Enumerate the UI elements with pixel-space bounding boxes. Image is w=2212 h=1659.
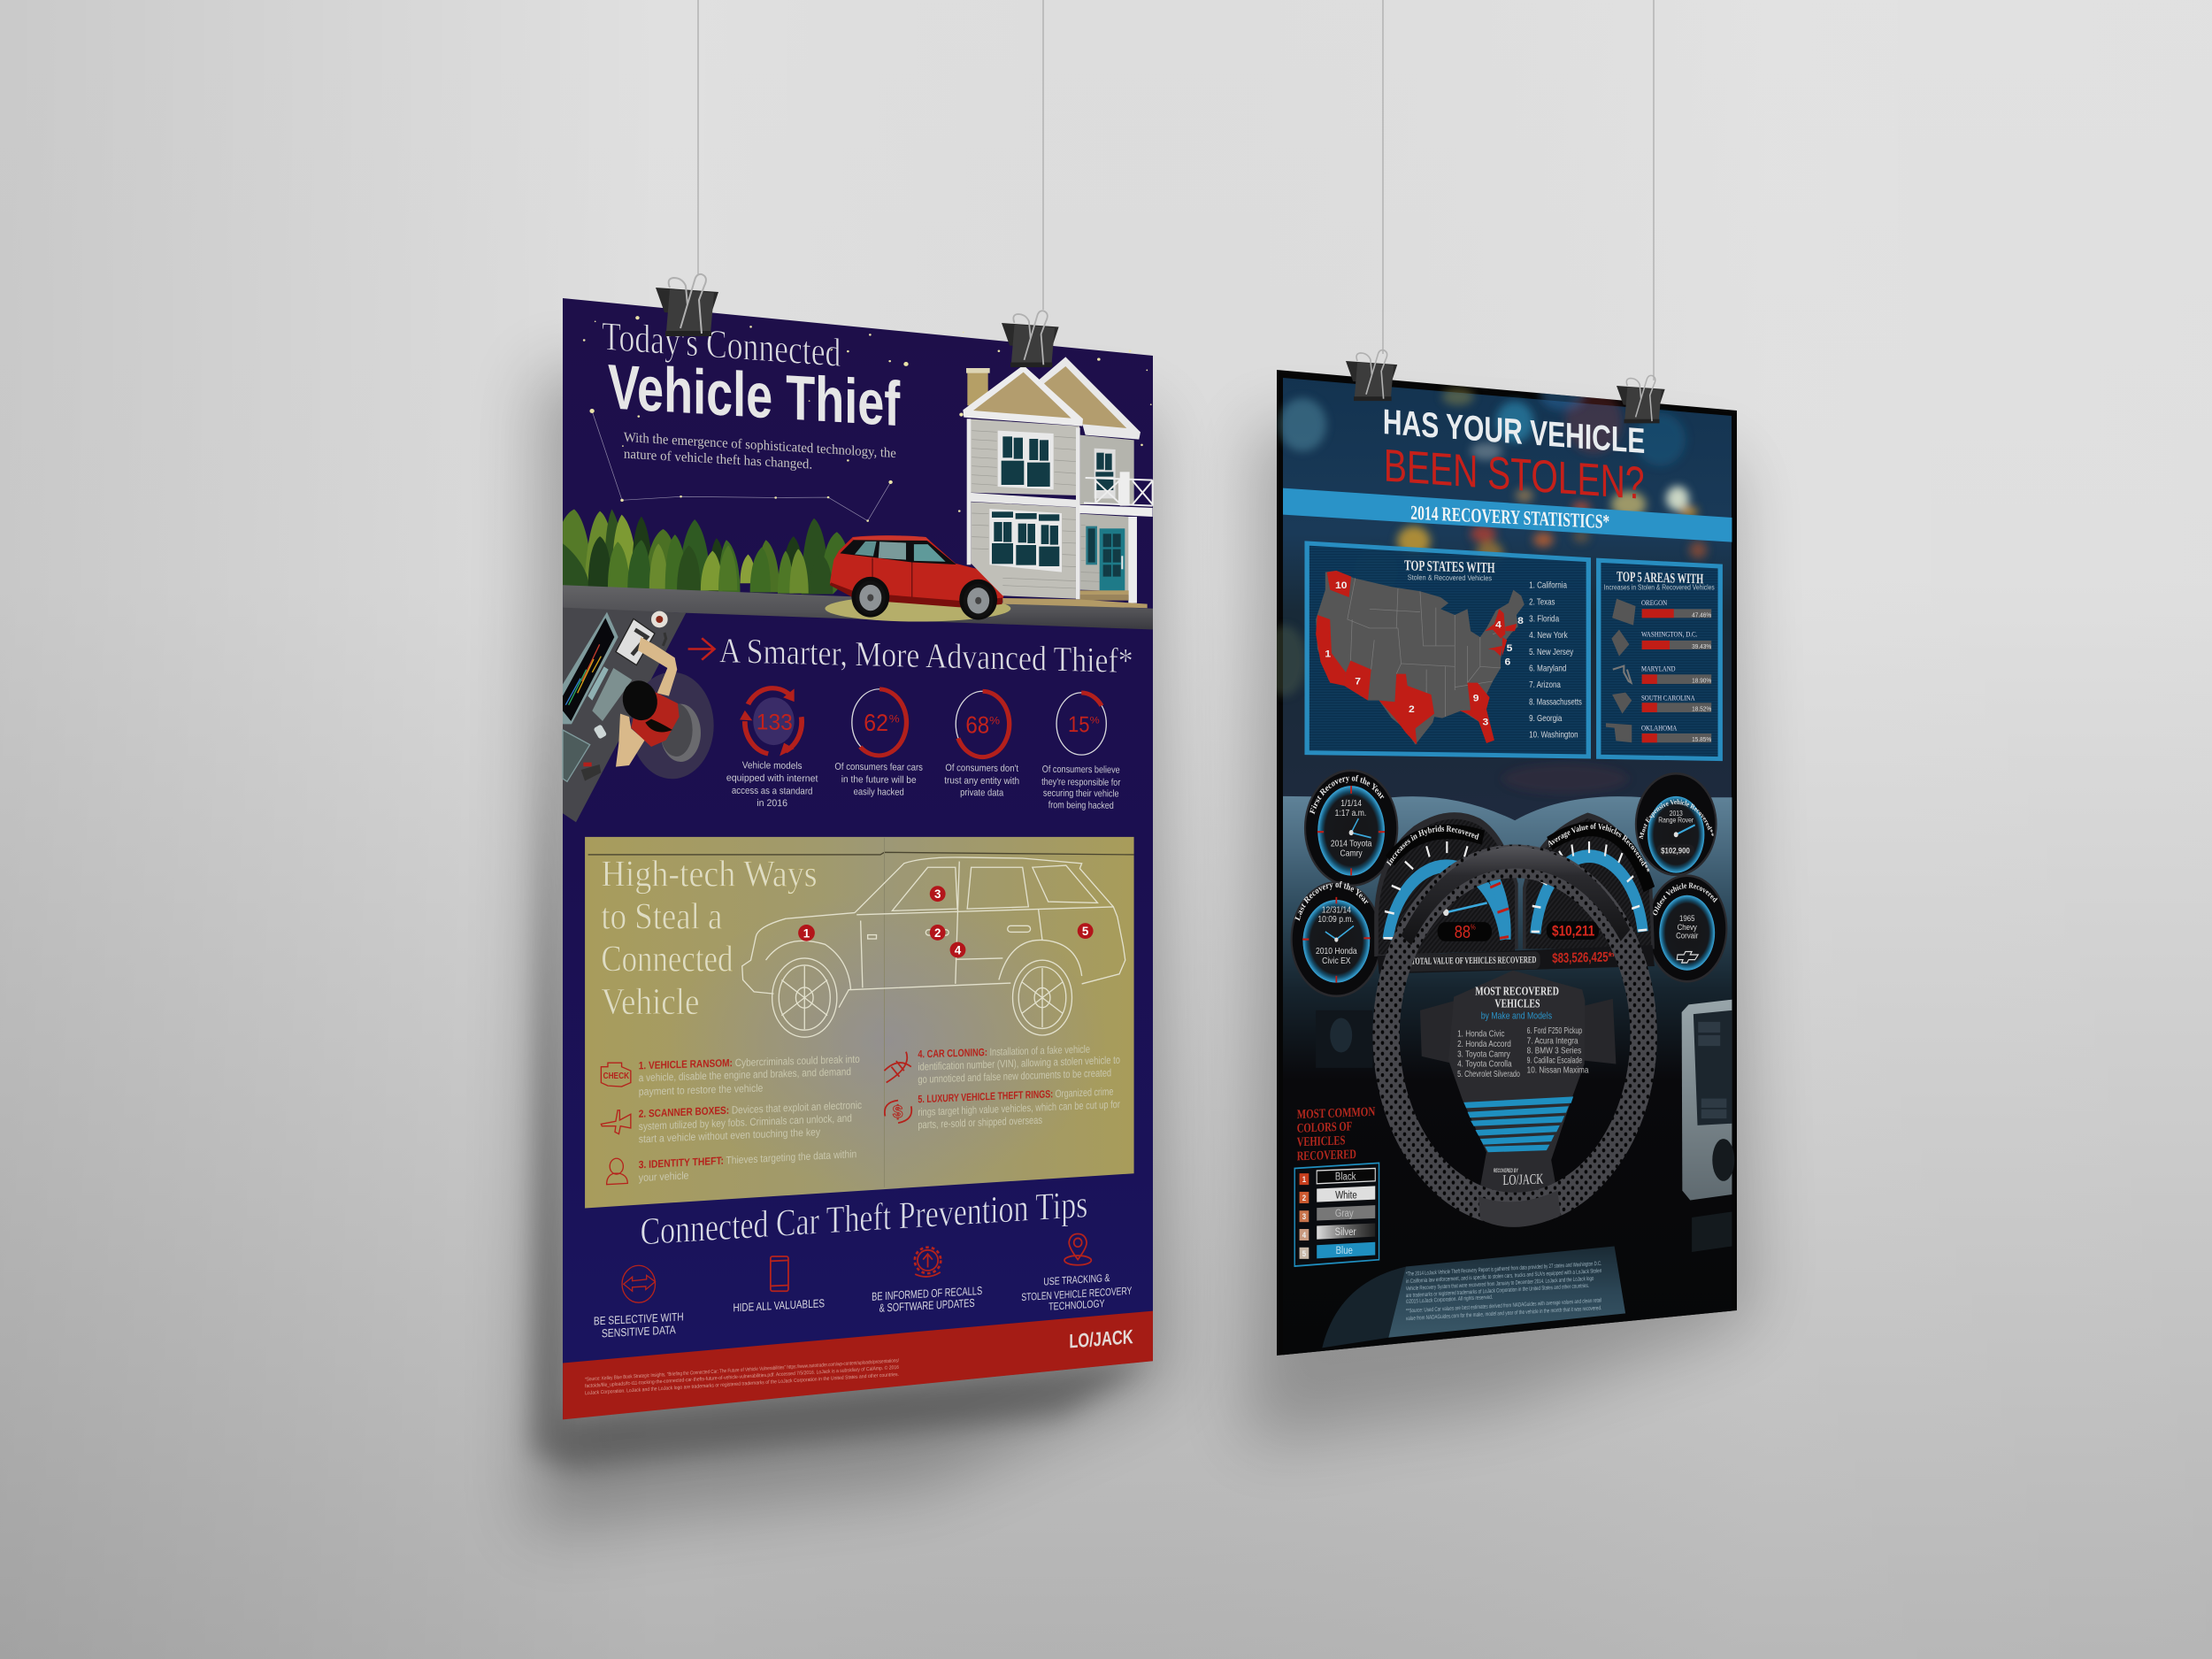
footer source text	[585, 1358, 899, 1396]
colors heading: COLORS OF	[1297, 1118, 1352, 1135]
tip: sensitive data	[594, 1265, 684, 1340]
disclaimer text: value from NADAGuides.com for the make, model and year of the vehicle in the month that it was recovered.	[1406, 1306, 1602, 1322]
recovered vehicles list: 1. Honda Civic	[1457, 1029, 1505, 1039]
panel heading: Connected	[601, 939, 733, 980]
prevention heading: Connected Car Theft Prevention Tips	[641, 1183, 1087, 1254]
recovered vehicles heading: MOST RECOVERED	[1475, 984, 1559, 998]
disclaimer text: *The 2014 LoJack Vehicle Theft Recovery Report is gathered from data provided by 27 states and Washington D.C.	[1406, 1261, 1602, 1278]
colors legend: Silver	[1335, 1226, 1356, 1238]
method 1: payment to restore the vehicle	[639, 1082, 764, 1098]
gauge: first recovery: First Recovery of the Year	[1310, 775, 1384, 814]
tip: tracking: STOLEN VEHICLE RECOVERY	[1021, 1285, 1132, 1303]
method 2: start a vehicle without even touching the key	[639, 1125, 820, 1145]
states ranking: 2. Texas	[1529, 598, 1555, 607]
gauge: hybrids: 88	[1455, 921, 1471, 941]
footer source text: *Source: Kelley Blue Book Strategic Insights, "Briefing the Connected Car: The Future of Vehicle Vulnerabilities" https://www.autotrader.com/wp-content/uploads/presentations/	[585, 1358, 899, 1383]
stat 15%: %	[1090, 714, 1100, 726]
states ranking: 9. Georgia	[1529, 714, 1562, 724]
stat 15%: 15	[1068, 711, 1090, 737]
panel heading: to Steal a	[601, 895, 723, 937]
disclaimer text: are trademarks or registered trademarks of LoJack Corporation in the United States and other countries.	[1406, 1283, 1589, 1299]
method 1	[601, 1053, 860, 1098]
stat 15%: Of consumers believe	[1042, 764, 1120, 775]
wheel logo	[1494, 1168, 1543, 1188]
gauge: first recovery: 1:17 a.m.	[1335, 808, 1366, 818]
states ranking: 1. California	[1529, 581, 1567, 591]
gauge: last recovery: Last Recovery of the Year	[1294, 881, 1368, 922]
areas heading: TOP 5 AREAS WITH	[1617, 568, 1703, 587]
dashboard section	[1283, 770, 1734, 1356]
footer source text: LoJack Corporation. LoJack and the LoJack logo are trademarks or registered trademarks of the LoJack Corporation in the United States and other countries.	[585, 1372, 899, 1396]
gauge: last recovery: 10:09 p.m.	[1317, 914, 1354, 925]
stat 15%: securing their vehicle	[1043, 788, 1119, 799]
recovered vehicles list: 9. Cadillac Escalade	[1527, 1056, 1582, 1065]
area: Washington DC: WASHINGTON, D.C.	[1641, 630, 1698, 638]
colors legend: Blue	[1336, 1245, 1353, 1256]
stat 68%: %	[989, 714, 1000, 726]
red title: BEEN STOLEN?	[1384, 440, 1645, 510]
gauge: most expensive: Range Rover	[1658, 816, 1694, 825]
icon: scanner key	[601, 1110, 631, 1134]
stat 15%	[1041, 693, 1121, 811]
US map: 10	[1335, 580, 1348, 591]
road	[563, 585, 1153, 629]
states ranking: 5. New Jersey	[1529, 648, 1574, 657]
disclaimer text: **Source: Used Car values are best estimates derived from NADAGuides with average values and clean retail	[1406, 1298, 1601, 1315]
icon: money arrows	[885, 1101, 911, 1123]
steering wheel	[1372, 845, 1657, 1227]
colors legend: 5	[1302, 1248, 1306, 1258]
gauge: average value: $10,211	[1552, 923, 1594, 940]
panel heading: High-tech Ways	[601, 854, 818, 895]
areas subheading: Increases in Stolen & Recovered Vehicles	[1604, 583, 1715, 592]
US map: 5	[1507, 642, 1513, 654]
area: South Carolina: SOUTH CAROLINA	[1641, 694, 1695, 703]
footer band	[563, 1311, 1153, 1419]
icon: check engine	[601, 1063, 631, 1087]
area: Oregon: OREGON	[1641, 598, 1668, 607]
US map	[1316, 571, 1525, 745]
disclaimer text: ©2015 LoJack Corporation. All rights reserved.	[1406, 1294, 1493, 1305]
recovered vehicles list: 7. Acura Integra	[1527, 1036, 1578, 1046]
method 4	[884, 1043, 1120, 1086]
states ranking: 8. Massachusetts	[1529, 698, 1582, 707]
recovered vehicles list	[1457, 1025, 1589, 1079]
wheel side spokes	[1420, 999, 1616, 1064]
wheel hub	[1448, 971, 1585, 1227]
stat 15%: from being hacked	[1048, 801, 1114, 811]
states ranking	[1529, 581, 1582, 741]
states ranking: 6. Maryland	[1529, 664, 1567, 673]
colors legend: 3	[1302, 1211, 1306, 1221]
method 4: identification number (VIN), allowing a stolen vehicle to	[918, 1054, 1120, 1073]
cast shadow: left poster	[531, 372, 1168, 1531]
title line one: Today's Connected	[602, 314, 841, 375]
stat 133: access as a standard	[732, 786, 812, 796]
stat 68%: Of consumers don't	[945, 764, 1019, 774]
colors legend	[1294, 1163, 1379, 1266]
method 1: 1. VEHICLE RANSOM: Cybercriminals could break into	[639, 1053, 860, 1071]
binder clip 1	[656, 274, 718, 336]
method 3: your vehicle	[639, 1169, 689, 1184]
colors legend: 2	[1302, 1193, 1306, 1202]
area: South Carolina: 18.52%	[1692, 705, 1711, 713]
method 4: 4. CAR CLONING: Installation of a fake vehicle	[918, 1043, 1090, 1060]
recovered vehicles list: 2. Honda Accord	[1457, 1039, 1511, 1048]
section heading: A Smarter, More Advanced Thief*	[719, 632, 1133, 681]
stat 133: Vehicle models	[742, 761, 803, 772]
method 5: rings target high value vehicles, which can be cut up for	[918, 1098, 1120, 1118]
LoJack logo: LO/JACK	[1069, 1325, 1133, 1353]
method 2: system utilized by key fobs. Criminals can unlock, and	[639, 1111, 852, 1133]
icon: person	[607, 1158, 627, 1185]
tip: sensitive data: SENSITIVE DATA	[602, 1323, 676, 1340]
wheel logo: LO/JACK	[1503, 1171, 1543, 1188]
stars	[583, 316, 1152, 512]
area: Oregon	[1612, 598, 1711, 626]
stat 62%: easily hacked	[854, 787, 904, 798]
stat 62%: in the future will be	[841, 775, 917, 786]
wheel logo: RECOVERED BY	[1494, 1168, 1518, 1174]
tip: hide valuables: HIDE ALL VALUABLES	[733, 1296, 825, 1314]
stat 62%	[834, 689, 923, 798]
gauge: oldest	[1647, 876, 1726, 981]
method 5: 5. LUXURY VEHICLE THEFT RINGS: Organized crime	[918, 1085, 1114, 1105]
method 2	[601, 1099, 862, 1145]
stat 133: equipped with internet	[726, 773, 818, 784]
tip: tracking	[1021, 1234, 1132, 1313]
states ranking: 4. New York	[1529, 631, 1568, 641]
area: Maryland: 18.90%	[1692, 677, 1711, 684]
US map: 8	[1517, 615, 1524, 626]
icon: check engine: CHECK	[603, 1071, 630, 1081]
section arrow	[688, 638, 714, 660]
poster background	[563, 298, 1153, 1419]
subtitle: nature of vehicle theft has changed.	[624, 446, 812, 472]
method 3: 3. IDENTITY THEFT: Thieves targeting the data within	[639, 1148, 856, 1171]
recovered vehicles list: 8. BMW 3 Series	[1527, 1046, 1582, 1056]
US map: 6	[1505, 657, 1511, 668]
tip: recalls: BE INFORMED OF RECALLS	[872, 1284, 982, 1303]
colors heading: VEHICLES	[1297, 1133, 1345, 1149]
states ranking: 7. Arizona	[1529, 680, 1561, 690]
gauge: last recovery	[1290, 881, 1379, 997]
area: Maryland: MARYLAND	[1641, 664, 1676, 672]
upper section	[1262, 380, 1732, 794]
recovered vehicles list: 5. Chevrolet Silverado	[1457, 1069, 1520, 1079]
method 1: a vehicle, disable the engine and brakes, and demand	[639, 1065, 851, 1084]
panel: top states map	[1307, 543, 1588, 757]
colors legend: White	[1335, 1189, 1357, 1202]
tip: recalls: & SOFTWARE UPDATES	[879, 1296, 975, 1315]
colors heading: RECOVERED	[1297, 1147, 1356, 1164]
colors legend: Black	[1335, 1171, 1356, 1183]
gauge: hybrids	[1374, 812, 1518, 956]
gauge: oldest: Chevy	[1678, 922, 1697, 932]
gauge: first recovery	[1304, 770, 1398, 887]
colors legend: 4	[1302, 1230, 1306, 1240]
wheel rim	[1372, 845, 1657, 1226]
gauge: average value	[1523, 813, 1655, 949]
stat 68%	[944, 691, 1019, 798]
recovered vehicles list: 6. Ford F250 Pickup	[1527, 1025, 1582, 1035]
tip: tracking: TECHNOLOGY	[1048, 1297, 1105, 1313]
stat 62%: Of consumers fear cars	[834, 762, 923, 773]
stat 62%: 62	[864, 709, 888, 736]
gauge: last recovery: 2010 Honda	[1316, 946, 1357, 956]
cast shadow: right poster	[1248, 425, 1752, 1442]
wheel top arc	[1402, 846, 1630, 945]
icon: money arrows: $	[893, 1102, 903, 1123]
banner	[1283, 488, 1732, 542]
tip: recalls	[872, 1248, 982, 1315]
blueprint markers	[798, 886, 1094, 957]
panel heading: Vehicle	[601, 981, 700, 1023]
blueprint markers: 5	[1082, 925, 1089, 938]
gauge: hybrids: Increases in Hybrids Recovered	[1386, 825, 1479, 866]
banner text: 2014 RECOVERY STATISTICS*	[1410, 502, 1609, 534]
icon: DNA	[884, 1052, 911, 1083]
gauge: most expensive: 2013	[1670, 809, 1683, 818]
car blueprint	[742, 857, 1125, 1037]
US map: 7	[1355, 676, 1361, 687]
main title: HAS YOUR VEHICLE	[1383, 401, 1645, 461]
method 5	[885, 1085, 1120, 1131]
colors legend: 1	[1302, 1174, 1306, 1184]
recovered vehicles list: 10. Nissan Maxima	[1527, 1065, 1589, 1075]
US map: 1	[1325, 649, 1332, 660]
gauge: average value: Average Value of Vehicles Recovered**	[1548, 823, 1649, 872]
stat 133: 133	[757, 709, 793, 734]
US map: 4	[1495, 619, 1502, 630]
gauge: first recovery: 2014 Toyota	[1331, 839, 1372, 849]
gauge: most expensive: Most Expensive Vehicle Recovered**	[1639, 799, 1714, 840]
panel: high-tech ways	[585, 837, 1134, 1209]
area: Oklahoma: OKLAHOMA	[1641, 724, 1678, 733]
US map: 9	[1473, 693, 1479, 703]
gauge: oldest: Oldest Vehicle Recovered	[1653, 883, 1718, 915]
poster: Today's Connected Vehicle Thief	[563, 298, 1153, 1419]
subtitle: With the emergence of sophisticated technology, the	[624, 429, 896, 461]
gauge: last recovery: 12/31/14	[1322, 905, 1352, 916]
center console	[1682, 1000, 1734, 1252]
total value strip: TOTAL VALUE OF VEHICLES RECOVERED	[1411, 955, 1536, 967]
house	[963, 357, 1153, 608]
stat 133: in 2016	[757, 798, 787, 809]
forest	[563, 510, 850, 594]
method 5: parts, re-sold or shipped overseas	[918, 1114, 1042, 1131]
wheel bottom grip	[1479, 1191, 1561, 1227]
note panel side	[1322, 1266, 1406, 1348]
disclaimer text	[1406, 1261, 1602, 1322]
binder clip 2	[1002, 311, 1059, 367]
gauge: hybrids: %	[1471, 924, 1476, 932]
colors heading: MOST COMMON	[1297, 1104, 1375, 1121]
tip: tracking: USE TRACKING &	[1043, 1271, 1110, 1288]
car headlight pool	[825, 595, 1010, 621]
tip: hide valuables	[733, 1256, 825, 1314]
dashboard base	[1283, 796, 1732, 1363]
upper poster illustrations and text	[563, 314, 1153, 811]
hacker illustration	[563, 608, 714, 822]
blueprint markers: 1	[803, 926, 810, 940]
panel heading	[601, 854, 818, 1023]
gauge: most expensive: $102,900	[1661, 846, 1690, 856]
recovered vehicles list: 3. Toyota Camry	[1457, 1049, 1510, 1059]
map subheading: Stolen & Recovered Vehicles	[1408, 573, 1492, 582]
stat 68%: trust any entity with	[944, 776, 1019, 787]
binder clip 3	[1346, 350, 1397, 401]
red SUV	[830, 535, 1005, 619]
gauge: first recovery: Camry	[1340, 849, 1363, 859]
blueprint markers: 3	[934, 887, 941, 901]
gauge: most expensive	[1635, 772, 1717, 876]
poster inner background	[1283, 378, 1732, 821]
method 4: go unnoticed and false new documents to be created	[918, 1066, 1111, 1086]
states ranking: 10. Washington	[1529, 731, 1578, 741]
light switch	[1316, 1010, 1372, 1068]
total value strip	[1378, 945, 1655, 974]
US map: 2	[1409, 703, 1415, 715]
gauge: oldest: Corvair	[1676, 931, 1698, 941]
stat 68%: private data	[960, 787, 1004, 798]
area: Maryland	[1613, 664, 1711, 684]
gauge: last recovery: Civic EX	[1322, 956, 1351, 966]
hanging wires	[698, 0, 1654, 380]
gauge: first recovery: 1/1/14	[1340, 798, 1363, 809]
area: Oklahoma: 15.85%	[1692, 735, 1711, 743]
blueprint markers: 2	[934, 926, 941, 940]
US map: 3	[1483, 717, 1489, 727]
stat 15%: they're responsible for	[1041, 777, 1121, 788]
area: Oklahoma	[1606, 723, 1711, 743]
poster: Has Your Vehicle Been Stolen	[1277, 370, 1737, 1356]
area: Oregon: 47.46%	[1692, 611, 1711, 618]
stat 62%: %	[889, 712, 900, 725]
recovered vehicles list: 4. Toyota Corolla	[1457, 1059, 1512, 1069]
panel: top 5 areas	[1599, 560, 1720, 759]
states ranking: 3. Florida	[1529, 615, 1559, 624]
colors heading	[1297, 1104, 1375, 1164]
gauge: oldest: 1965	[1679, 914, 1695, 923]
area: Washington DC	[1611, 630, 1711, 657]
recovered vehicles heading: VEHICLES	[1494, 996, 1540, 1010]
wheel stripes	[1463, 1096, 1573, 1152]
recovered vehicles heading	[1475, 984, 1559, 1010]
disclaimer text: Vehicle Recovery System that were recovered from January to December 2014. LoJack and the LoJack logo	[1406, 1276, 1594, 1293]
method 2: 2. SCANNER BOXES: Devices that exploit an electronic	[639, 1099, 862, 1120]
binder clip 4	[1617, 375, 1665, 423]
recovered vehicles subheading: by Make and Models	[1481, 1011, 1552, 1022]
lower poster content	[563, 837, 1153, 1419]
tip: sensitive data: BE SELECTIVE WITH	[594, 1310, 684, 1328]
total value strip: $83,526,425**	[1552, 949, 1617, 966]
bokeh lights	[1262, 380, 1707, 794]
footer source text: factoids/file_uploads/fc-t11-tracking-the-connected-car-thefts-future-of-vehicle-vulnerabilities.pdf. Accessed 7/5/2016. LoJack is a subsidiary of CalAmp. © 2016	[585, 1364, 899, 1389]
method 3	[607, 1148, 856, 1185]
disclaimer text: in California law enforcement, and is specific to stolen cars, trucks and SUVs equipped with a LoJack Stolen	[1406, 1269, 1601, 1285]
blueprint markers: 4	[955, 943, 962, 956]
area: Washington DC: 39.43%	[1692, 642, 1711, 650]
cast shadow: left poster contact	[531, 708, 1150, 1469]
stat 68%: 68	[965, 710, 989, 738]
colors legend: Gray	[1335, 1208, 1354, 1219]
map heading: TOP STATES WITH	[1404, 557, 1495, 576]
constellation	[589, 409, 893, 522]
black frame	[1277, 370, 1737, 1356]
note panel	[1388, 1247, 1625, 1338]
title line two: Vehicle Thief	[608, 350, 901, 439]
stat 133	[726, 688, 818, 809]
area: South Carolina	[1612, 693, 1711, 714]
